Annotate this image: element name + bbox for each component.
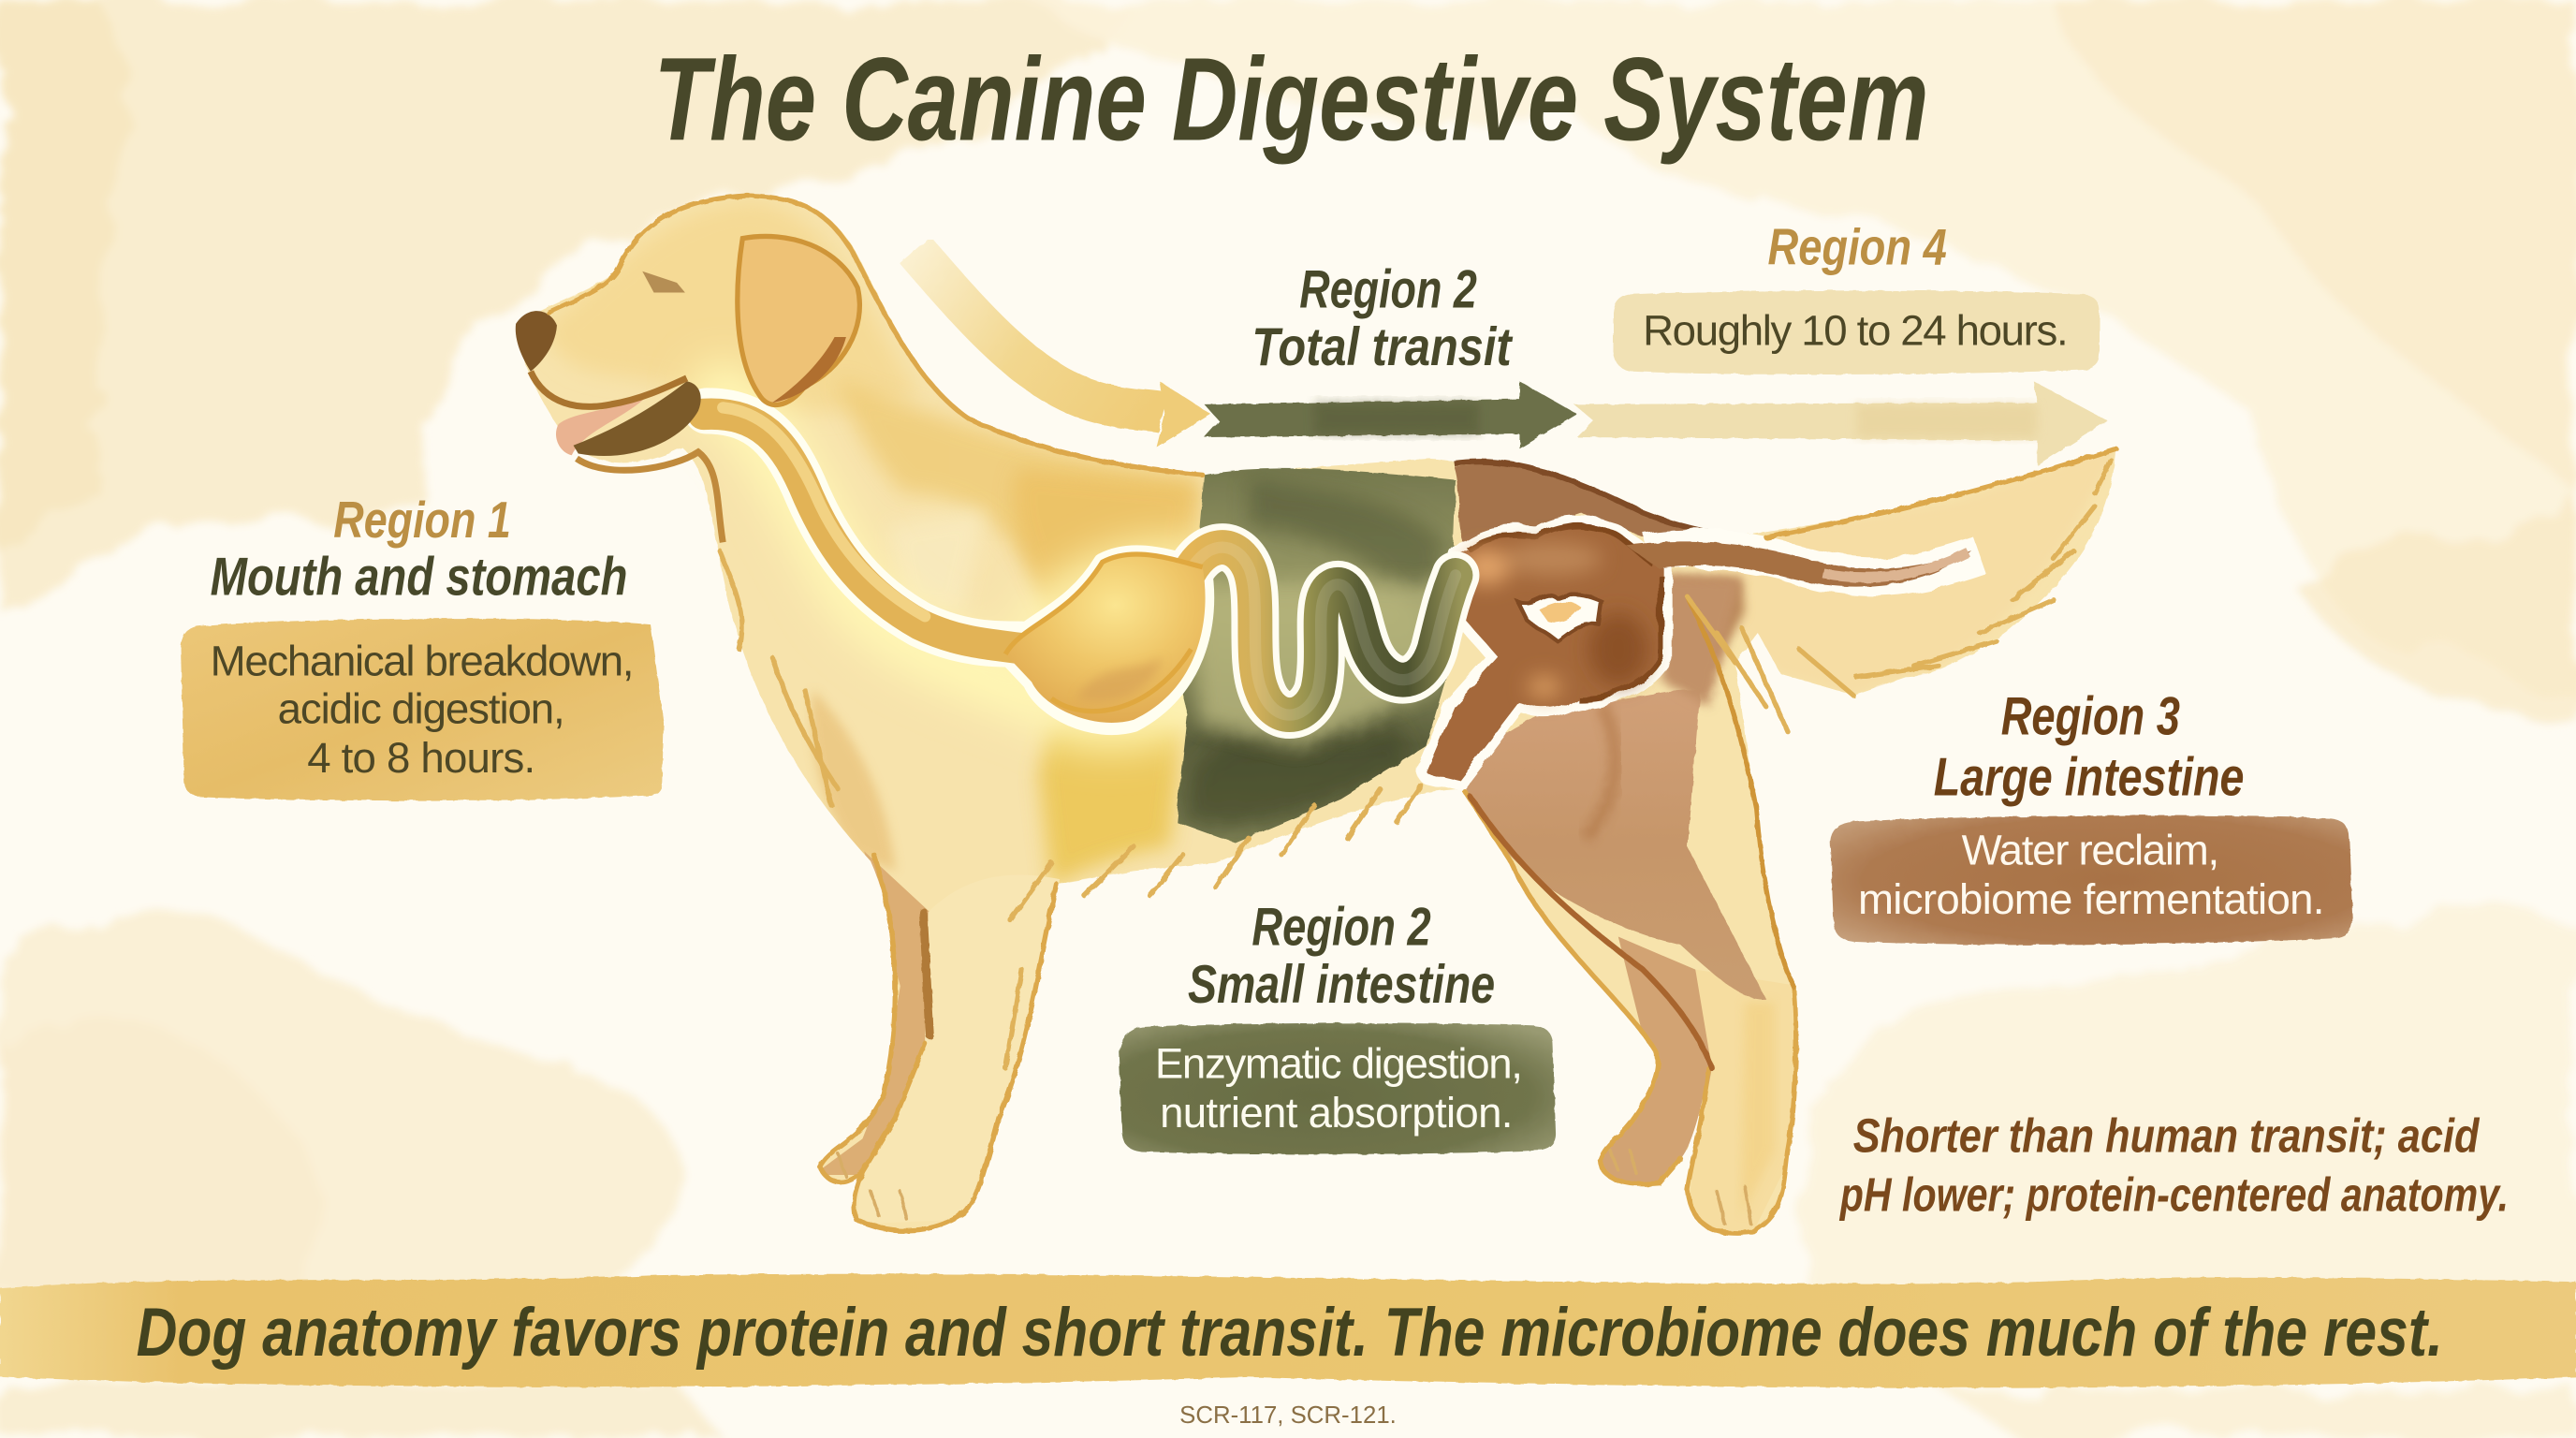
panel: region 4 description: Roughly 10 to 24 hours.	[1643, 307, 2069, 355]
note: comparison annotation	[1838, 1108, 2509, 1222]
dog: outline strokes	[549, 196, 2116, 1233]
region: brown thigh wash	[1460, 575, 1766, 999]
label: region 1 heading: Region 1	[333, 492, 511, 549]
label: region 2 small intestine	[1188, 897, 1495, 1015]
label: region 3 heading: Region 3	[2001, 687, 2180, 747]
label: region 1 heading	[211, 492, 627, 607]
outline: muzzle and lower jaw	[531, 372, 687, 406]
hip and tail	[1750, 452, 2115, 693]
icon: nose	[516, 311, 557, 372]
caption: sources: SCR-117, SCR-121.	[1179, 1402, 1397, 1429]
panel: region 1 description: acidic digestion,	[278, 684, 565, 732]
panel: region 2 description: Enzymatic digestion,	[1155, 1039, 1523, 1087]
banner: takeaway	[0, 1274, 2576, 1387]
region: green small intestine body panel	[1177, 468, 1456, 843]
sub-element: stomach	[1005, 554, 1206, 723]
near hind leg	[1686, 970, 1799, 1236]
near front leg	[925, 875, 1060, 1041]
label: region 3 heading	[1934, 687, 2244, 808]
far front leg	[813, 851, 929, 1175]
note: comparison annotation: Shorter than human transit; acid	[1853, 1108, 2480, 1162]
panel: region 1 description: Mechanical breakdown,	[211, 637, 634, 684]
panel: region 3 description	[1830, 815, 2352, 945]
label: region 2 total transit: Region 2	[1299, 259, 1477, 319]
panel: region 1 description	[181, 619, 664, 800]
label: region 3 heading: Large intestine	[1934, 748, 2244, 808]
arrow: green transit arrow	[1204, 381, 1577, 448]
dog: fur strokes	[720, 461, 2111, 1068]
panel: region 2 description: nutrient absorption.	[1160, 1089, 1513, 1137]
label: region 2 total transit: Total transit	[1251, 317, 1514, 377]
sub-element: rectum tube	[1627, 542, 1971, 587]
title: The Canine Digestive System	[654, 33, 1928, 165]
panel: region 4 description	[1614, 290, 2100, 374]
icon: ear	[738, 236, 859, 404]
panel: region 2 description	[1119, 1023, 1556, 1154]
dog: body colour washes	[542, 200, 2119, 1236]
region: brown large intestine	[1426, 524, 1662, 781]
label: region 2 small intestine: Small intestine	[1188, 955, 1495, 1015]
region: white halo around large intestine	[1426, 524, 1980, 781]
dog: body silhouette	[516, 196, 2116, 1233]
sub-element: esophagus tube	[703, 407, 1038, 651]
icon: eye	[642, 271, 685, 293]
icon: inner ear shadow	[772, 337, 846, 403]
panel: region 3 description: Water reclaim,	[1962, 826, 2219, 873]
arrow: pale transit arrow	[1573, 381, 2108, 465]
dog: head details	[516, 236, 859, 542]
icon: mouth	[574, 381, 701, 456]
sub-element: large intestine central loop	[1518, 594, 1602, 641]
panel: region 3 description: microbiome fermentation.	[1858, 875, 2324, 923]
far hind leg	[1603, 936, 1711, 1182]
label: region 1 heading: Mouth and stomach	[211, 547, 627, 607]
icon: tongue	[556, 394, 649, 455]
sub-element: large intestine highlights	[1464, 542, 1647, 698]
dog: digestive tract glow	[723, 394, 1208, 727]
label: region 2 small intestine: Region 2	[1251, 897, 1431, 957]
arrow: golden curved flow arrow	[915, 250, 1211, 448]
label: region 2 total transit	[1251, 259, 1514, 377]
dog illustration	[516, 196, 2119, 1236]
region: brown upper back patch	[1454, 462, 1766, 550]
panel: region 1 description: 4 to 8 hours.	[307, 734, 535, 782]
sub-element: small intestine tube	[1186, 548, 1456, 715]
label: region 4 heading: Region 4	[1767, 219, 1947, 276]
sub-element: esophagus and stomach halo	[707, 411, 1206, 726]
